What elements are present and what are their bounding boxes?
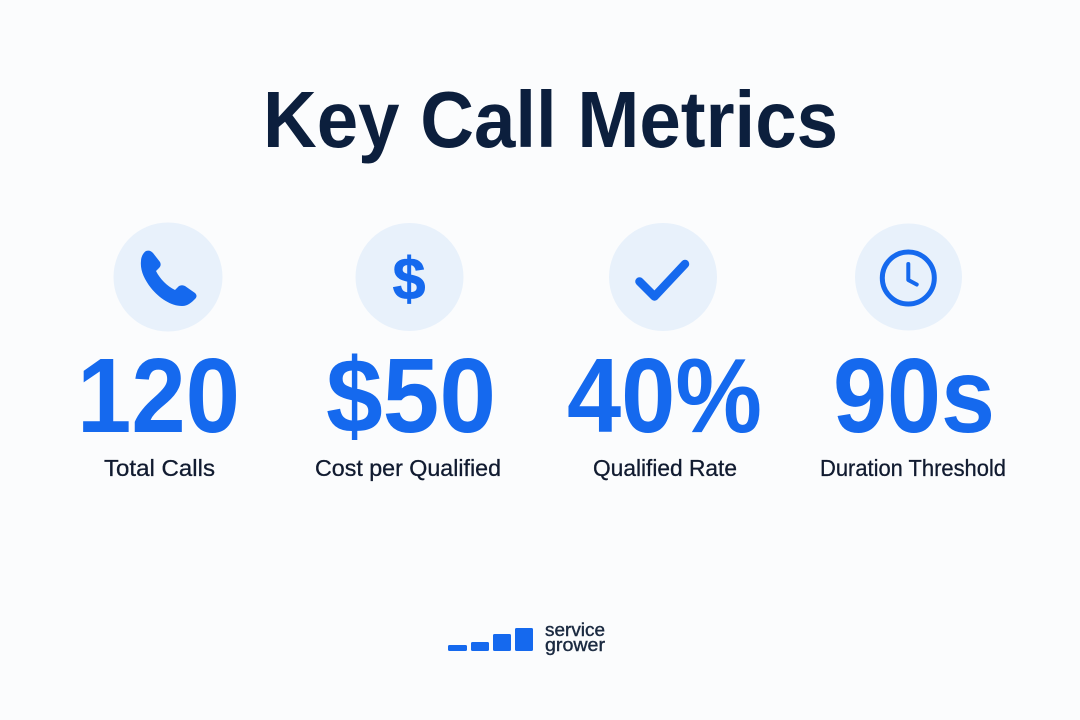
- label: total calls: Total Calls: [104, 455, 215, 481]
- value: 40%: 40%: [567, 337, 762, 455]
- icon: rising bars: [448, 628, 533, 651]
- icon: clock: [855, 224, 962, 330]
- title: Key Call Metrics: [263, 75, 838, 164]
- wordmark: grower: [545, 635, 605, 655]
- metric: total calls: [77, 222, 240, 481]
- icon: dollar: $: [393, 246, 425, 312]
- value: 90s: 90s: [833, 337, 995, 455]
- wordmark: service: [545, 620, 605, 640]
- icon: check mark: [609, 223, 717, 331]
- logo: service grower: [448, 620, 605, 655]
- metric: duration threshold: [820, 224, 1006, 481]
- label: cost per qualified: Cost per Qualified: [315, 455, 501, 481]
- label: duration threshold: Duration Threshold: [820, 455, 1006, 481]
- icon: phone: [114, 222, 222, 332]
- value: 120: 120: [77, 337, 240, 455]
- label: qualified rate: Qualified Rate: [593, 455, 737, 481]
- icon: dollar: [356, 223, 464, 331]
- metric: qualified rate: [567, 223, 762, 481]
- metric: cost per qualified: [315, 223, 501, 481]
- value: $50: $50: [326, 337, 496, 455]
